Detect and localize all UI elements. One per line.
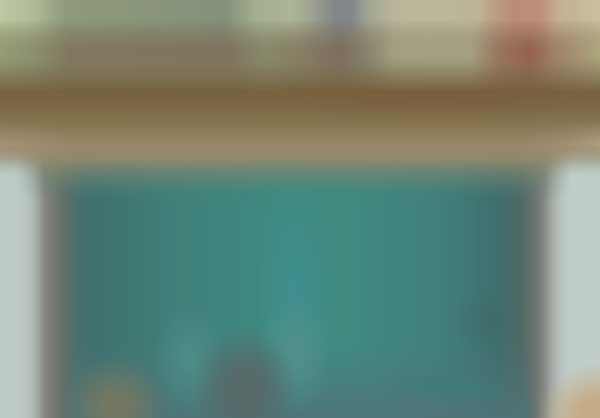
olive blob lower left xyxy=(60,350,170,418)
teal band lower right xyxy=(380,368,520,408)
board glow column xyxy=(245,175,345,385)
lower wall row with object bases xyxy=(0,26,600,86)
pale column left xyxy=(140,300,240,418)
dark mound between columns xyxy=(185,325,305,418)
left pale wall strip xyxy=(0,152,40,418)
wall row above the shelf xyxy=(0,0,600,46)
board lower fade xyxy=(70,345,530,418)
shelf warm tint under objects xyxy=(270,65,600,125)
right pale wall strip xyxy=(548,152,600,418)
pale column centre xyxy=(245,290,345,415)
shelf corner highlights xyxy=(0,126,600,155)
wooden shelf band xyxy=(0,0,600,200)
dark patch right of board xyxy=(450,285,525,355)
teal board with frame and side walls xyxy=(18,162,570,418)
tan patch lower right xyxy=(530,350,600,418)
